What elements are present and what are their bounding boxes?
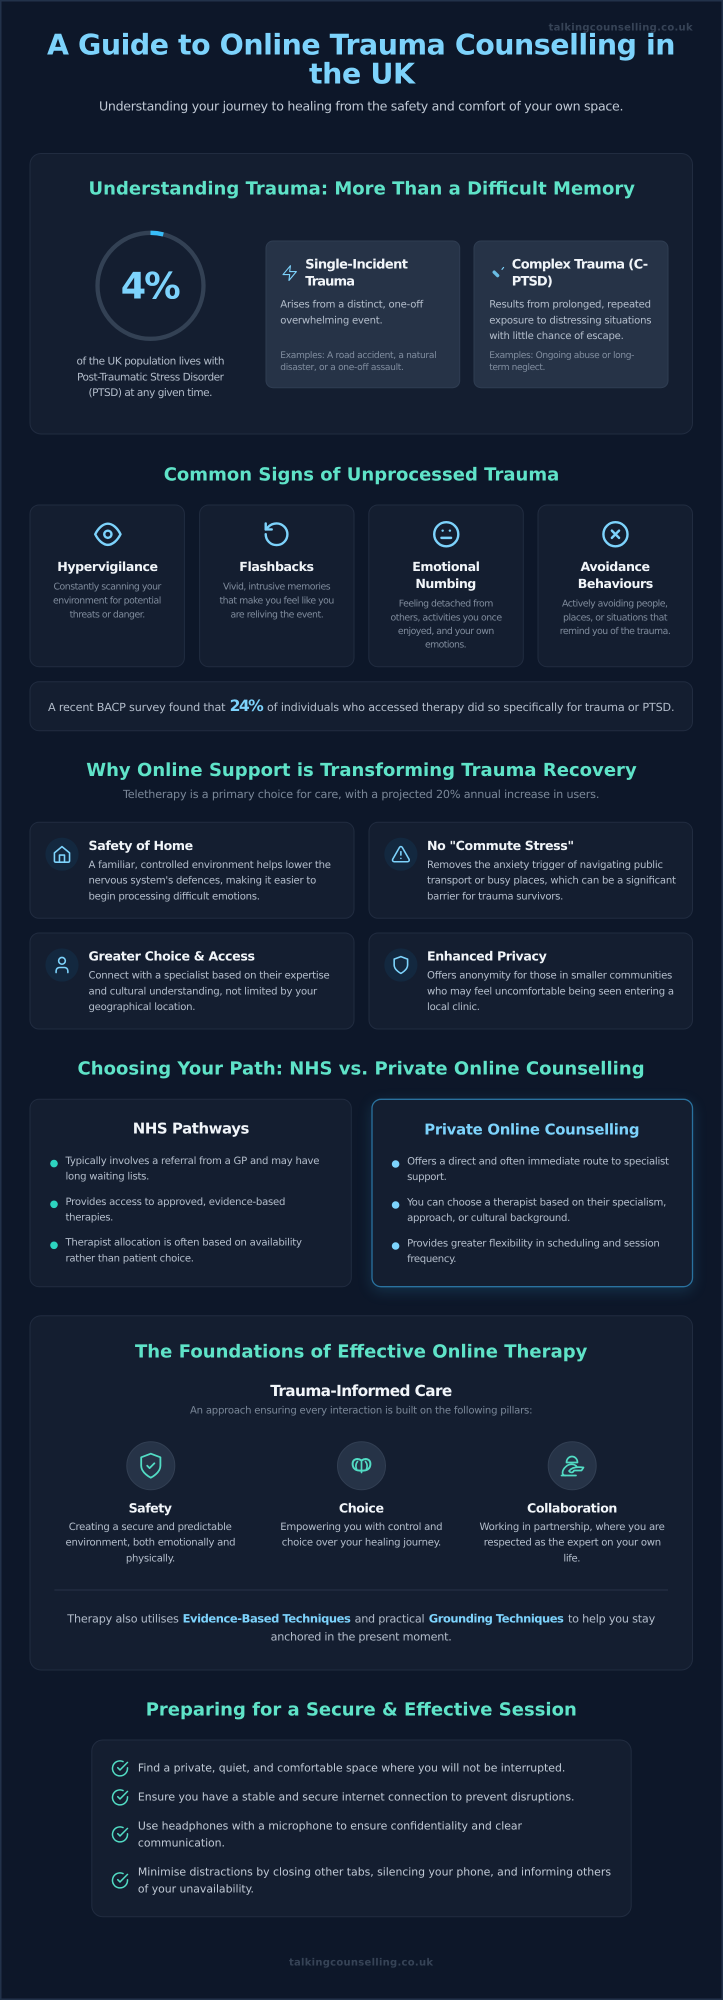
callout: 24% BACP survey <box>30 682 692 731</box>
watermark: top: talkingcounselling.co.uk <box>549 23 693 34</box>
list item: long waiting lists. <box>66 1171 149 1182</box>
closing text: techniques: and practical <box>355 1612 425 1625</box>
heading: preparing for a session: Preparing for a Secure & Effective Session <box>146 1700 577 1721</box>
panel heading: NHS Pathways <box>133 1120 250 1138</box>
icon: lightning <box>283 266 296 280</box>
card description: others, activities you once <box>390 613 502 624</box>
icon: person <box>45 948 79 982</box>
card title <box>512 258 648 290</box>
card description: exposure to distressing situations <box>489 315 652 326</box>
card description: emotions. <box>425 639 467 650</box>
card examples: Examples: Ongoing abuse or long- <box>489 351 634 361</box>
checklist item: Use headphones with a microphone to ensure confidentiality and clear <box>138 1819 523 1832</box>
checklist item: Ensure you have a stable and secure internet connection to prevent disruptions. <box>138 1791 574 1804</box>
card: greater choice <box>30 933 354 1029</box>
pillar: collaboration: respected as the expert on your own <box>484 1538 661 1549</box>
list item: frequency. <box>407 1254 456 1265</box>
card description: Connect with a specialist based on their expertise <box>88 971 330 982</box>
callout: 24% BACP survey: A recent BACP survey found that <box>48 701 226 714</box>
list item <box>50 1156 319 1182</box>
card title: Single-Incident <box>305 258 408 273</box>
card description: and cultural understanding, not limited by your <box>88 986 318 997</box>
closing text: techniques: to help you stay <box>568 1612 656 1625</box>
card description: Arises from a distinct, one-off <box>280 300 424 311</box>
list item: Provides access to approved, evidence-based <box>66 1197 285 1208</box>
list item: You can choose a therapist based on their specialism, <box>406 1198 666 1209</box>
list item <box>392 1157 669 1183</box>
card description: Feeling detached from <box>399 599 493 610</box>
icon: neutral face <box>434 522 458 546</box>
card: complex trauma <box>474 241 668 388</box>
stat caption: Post-Traumatic Stress Disorder <box>77 371 225 383</box>
card description: overwhelming event. <box>280 315 383 326</box>
card description <box>390 599 502 650</box>
checklist item: communication. <box>138 1836 225 1849</box>
stat ring: 4%: 4% <box>121 264 181 307</box>
title: A Guide to Online Trauma Counselling in <box>47 28 676 61</box>
card: safety of home <box>30 822 354 918</box>
card description: transport or busy places, which can be a significant <box>427 876 676 887</box>
card description <box>88 971 330 1013</box>
pillar: safety: Safety <box>129 1500 172 1515</box>
card description: Actively avoiding people, <box>562 599 668 610</box>
card description: enjoyed, and your own <box>398 626 494 637</box>
heading: foundations: The Foundations of Effective Online Therapy <box>135 1341 588 1362</box>
card description: Constantly scanning your <box>54 582 162 593</box>
card: no commute stress <box>369 822 692 918</box>
card description: with little chance of escape. <box>489 331 624 342</box>
card title: Flashbacks <box>239 559 314 574</box>
icon: warning triangle <box>384 838 418 871</box>
checklist item: Minimise distractions by closing other tabs, silencing your phone, and informing others <box>138 1865 611 1878</box>
pillar: choice: Choice <box>339 1500 384 1515</box>
list item: Provides greater flexibility in scheduling and session <box>407 1238 660 1249</box>
pillar: safety: physically. <box>126 1553 175 1564</box>
card title: No "Commute Stress" <box>427 838 574 853</box>
card description <box>280 300 424 326</box>
card description <box>427 860 676 902</box>
icon: x in circle <box>603 522 628 546</box>
stat caption <box>76 356 225 399</box>
card examples: disaster, or a one-off assault. <box>280 363 404 373</box>
card title: Behaviours <box>578 576 653 591</box>
list item: Offers a direct and often immediate route to specialist <box>407 1157 669 1168</box>
card title: Complex Trauma (C- <box>512 258 648 273</box>
list item: therapies. <box>66 1212 113 1223</box>
card description: nervous system's defences, making it easier to <box>88 876 316 887</box>
card: flashbacks <box>200 505 354 667</box>
card description: begin processing difficult emotions. <box>88 891 260 902</box>
callout: 24% BACP survey: 24% <box>230 697 264 715</box>
card: hypervigilance <box>30 505 184 667</box>
list item: Typically involves a referral from a GP and may have <box>64 1156 320 1167</box>
pillar: choice: Empowering you with control and <box>280 1522 443 1533</box>
card examples: term neglect. <box>489 363 545 373</box>
pillar: collaboration <box>480 1442 665 1564</box>
card: avoidance behaviours <box>538 505 692 667</box>
closing text: techniques <box>66 1611 656 1643</box>
checklist item: of your unavailability. <box>138 1882 254 1895</box>
card description: are reliving the event. <box>230 609 324 620</box>
panel heading: Private Online Counselling <box>424 1120 640 1138</box>
card title: PTSD) <box>512 275 553 290</box>
stat caption: of the UK population lives with <box>76 356 224 368</box>
list item: rather than patient choice. <box>66 1253 194 1264</box>
icon: complex trauma glyph <box>494 267 504 276</box>
card examples <box>489 351 634 373</box>
closing text: techniques: Grounding Techniques <box>429 1611 564 1625</box>
card description: Offers anonymity for those in smaller communities <box>427 971 672 982</box>
card description: A familiar, controlled environment helps lower the <box>88 860 331 871</box>
footer: website: talkingcounselling.co.uk <box>289 1958 433 1969</box>
closing text: techniques: anchored in the present moment. <box>271 1630 452 1643</box>
subtitle: Understanding your journey to healing from the safety and comfort of your own space. <box>99 98 624 114</box>
icon: shield <box>384 948 418 982</box>
pillar: safety: Creating a secure and predictable <box>69 1522 232 1533</box>
card description: Vivid, intrusive memories <box>223 582 331 593</box>
pillar: collaboration: Collaboration <box>527 1500 617 1515</box>
pillar: choice: choice over your healing journey. <box>282 1538 441 1549</box>
panel: foundations of effective therapy <box>30 1316 692 1670</box>
heading: understanding trauma: Understanding Trauma: More Than a Difficult Memory <box>88 178 635 199</box>
card description: environment for potential <box>53 595 161 606</box>
list item <box>392 1238 660 1265</box>
panel: NHS pathways <box>30 1099 351 1287</box>
card description <box>427 971 674 1013</box>
callout: 24% BACP survey: of individuals who accessed therapy did so specifically for trauma or PTSD. <box>267 701 674 714</box>
stat ring: 4% <box>98 233 204 339</box>
card title <box>578 559 653 591</box>
list item: approach, or cultural background. <box>407 1213 570 1224</box>
checklist item: Find a private, quiet, and comfortable space where you will not be interrupted. <box>138 1762 565 1775</box>
title: the UK <box>309 57 416 90</box>
panel: private online counselling <box>372 1099 692 1287</box>
list item: Therapist allocation is often based on availability <box>64 1238 302 1249</box>
panel: session checklist <box>92 1740 631 1917</box>
card description: remind you of the trauma. <box>560 626 671 637</box>
card: emotional numbing <box>369 505 523 667</box>
card description <box>53 582 162 620</box>
card title: Trauma <box>305 275 355 290</box>
pillar: collaboration: Working in partnership, where you are <box>480 1522 665 1533</box>
card description: barrier for trauma survivors. <box>427 891 563 902</box>
card description <box>489 300 652 342</box>
card description <box>560 599 671 637</box>
closing text: techniques: Evidence-Based Techniques <box>183 1611 351 1625</box>
card title: Numbing <box>415 576 476 591</box>
card title: Safety of Home <box>88 838 193 853</box>
card title: Enhanced Privacy <box>427 949 547 964</box>
card title: Emotional <box>412 559 480 574</box>
card description: Results from prolonged, repeated <box>489 300 651 311</box>
stat caption: (PTSD) at any given time. <box>88 387 212 399</box>
list item <box>50 1238 302 1264</box>
card title <box>305 258 408 290</box>
pillar: safety: environment, both emotionally and <box>66 1538 236 1549</box>
card description: places, or situations that <box>563 613 668 624</box>
card description: threats or danger. <box>70 609 145 620</box>
card description: local clinic. <box>427 1002 480 1013</box>
card description: Removes the anxiety trigger of navigating public <box>427 860 663 871</box>
panel: understanding trauma <box>30 154 692 434</box>
heading: choosing your path: Choosing Your Path: NHS vs. Private Online Counselling <box>78 1059 645 1080</box>
card examples <box>280 351 437 373</box>
subheading: trauma-informed care: Trauma-Informed Care <box>270 1382 452 1400</box>
list item <box>392 1198 666 1224</box>
title <box>47 28 676 90</box>
card: enhanced privacy <box>369 933 692 1029</box>
heading: common signs: Common Signs of Unprocessed Trauma <box>164 465 559 486</box>
checklist item <box>112 1819 523 1849</box>
pillar: safety <box>66 1442 236 1564</box>
card title: Greater Choice & Access <box>88 949 255 964</box>
icon: rotate back <box>266 523 287 545</box>
pillar: choice <box>280 1442 443 1549</box>
card description <box>220 582 334 620</box>
card: single-incident trauma <box>266 241 460 388</box>
closing text: techniques: Therapy also utilises <box>66 1612 179 1625</box>
heading: why online support: Why Online Support is Transforming Trauma Recovery <box>86 760 637 781</box>
section subtitle: Teletherapy is a primary choice for care, with a projected 20% annual increase in users. <box>122 788 599 801</box>
icon: eye <box>95 524 121 545</box>
card description: that make you feel like you <box>220 595 334 606</box>
card description: who may feel uncomfortable being seen entering a <box>427 986 674 997</box>
intro line: An approach ensuring every interaction is built on the following pillars: <box>190 1406 532 1417</box>
card title: Hypervigilance <box>57 559 158 574</box>
list item <box>50 1197 285 1223</box>
card description: geographical location. <box>88 1002 196 1013</box>
list item: support. <box>407 1172 447 1183</box>
card title: Avoidance <box>580 559 650 574</box>
card title <box>412 559 480 591</box>
pillar: collaboration: life. <box>563 1553 580 1564</box>
checklist item <box>112 1865 611 1895</box>
card examples: Examples: A road accident, a natural <box>280 351 437 361</box>
card description <box>88 860 331 902</box>
icon: home <box>45 838 79 871</box>
